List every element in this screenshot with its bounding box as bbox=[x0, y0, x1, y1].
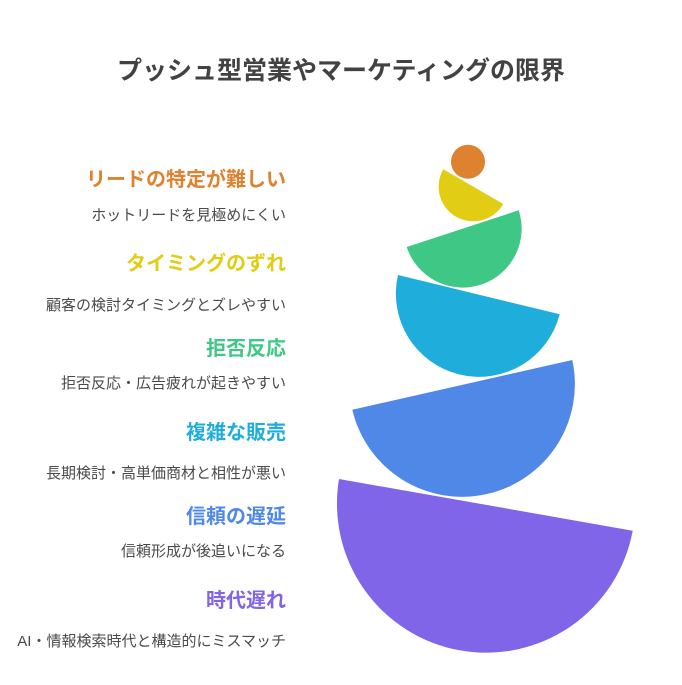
text: lead identification: ホットリードを見極めにくい bbox=[91, 207, 286, 224]
heading: rejection: 拒否反応 bbox=[206, 338, 286, 360]
text: complex sales: 長期検討・高単価商材と相性が悪い bbox=[46, 465, 286, 482]
heading: trust delay: 信頼の遅延 bbox=[186, 506, 286, 528]
text: trust delay: 信頼形成が後追いになる bbox=[121, 543, 286, 560]
text: timing: 顧客の検討タイミングとズレやすい bbox=[46, 297, 286, 314]
shape: green half circle bbox=[407, 210, 522, 288]
text: outdated: AI・情報検索時代と構造的にミスマッチ bbox=[17, 633, 286, 650]
heading: timing: タイミングのずれ bbox=[126, 253, 286, 275]
shape: yellow half circle bbox=[439, 169, 503, 221]
shape: purple half circle bbox=[337, 479, 633, 653]
heading: outdated: 時代遅れ bbox=[206, 590, 286, 612]
title: プッシュ型営業やマーケティングの限界 bbox=[117, 57, 565, 85]
shape: cyan half circle bbox=[396, 275, 560, 377]
text: rejection: 拒否反応・広告疲れが起きやすい bbox=[61, 375, 286, 392]
heading: complex sales: 複雑な販売 bbox=[186, 422, 286, 444]
heading: lead identification: リードの特定が難しい bbox=[86, 169, 286, 191]
shape: blue half circle bbox=[352, 360, 575, 497]
shape: orange circle bbox=[451, 145, 485, 179]
